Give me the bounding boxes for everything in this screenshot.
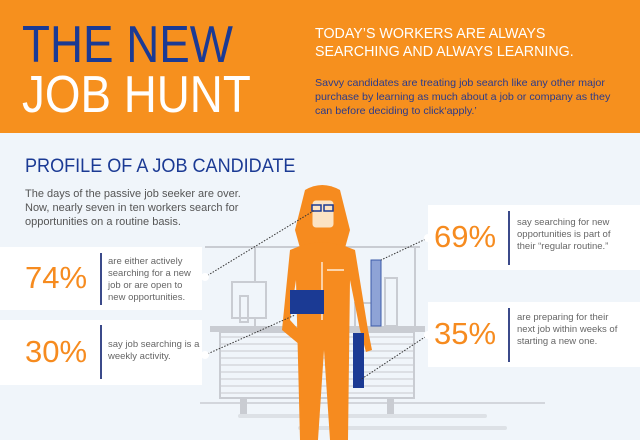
stat: 35% (428, 302, 640, 367)
title: THE NEW (22, 16, 233, 74)
subheading: TODAY’S WORKERS ARE ALWAYS (315, 25, 545, 42)
stat: 74% (0, 247, 202, 310)
intro text: purchase by learning as much about a job or company as they (315, 91, 610, 103)
intro text: can before deciding to click‘apply.’ (315, 105, 477, 117)
stat: 30%: say job searching is a (108, 339, 199, 350)
stat: 74%: searching for a new (108, 268, 191, 279)
subheading: SEARCHING AND ALWAYS LEARNING. (315, 43, 574, 60)
stat: 35%: are preparing for their (517, 312, 608, 323)
stat: 69%: their “regular routine.” (517, 241, 608, 252)
stat: 74%: new opportunities. (108, 292, 185, 303)
stat: 69% (428, 205, 640, 270)
stat: 69%: 69% (434, 219, 496, 254)
stat: 74%: 74% (25, 260, 87, 295)
section intro: The days of the passive job seeker are over. (25, 188, 241, 200)
section heading: PROFILE OF A JOB CANDIDATE (25, 156, 295, 177)
stat: 30% (0, 320, 202, 385)
intro text (315, 77, 610, 117)
stat: 35%: 35% (434, 316, 496, 351)
section intro: Now, nearly seven in ten workers search for (25, 202, 238, 214)
stat: 69%: opportunities is part of (517, 229, 610, 240)
subheading (315, 25, 574, 60)
header band (0, 0, 640, 133)
intro text: Savvy candidates are treating job search like any other major (315, 77, 605, 89)
stat: 35%: next job within weeks of (517, 324, 617, 335)
stat: 74%: are either actively (108, 256, 182, 267)
stat: 30%: 30% (25, 334, 87, 369)
stat: 74%: job or are open to (108, 280, 182, 291)
section intro: opportunities on a routine basis. (25, 216, 181, 228)
stat: 69%: say searching for new (517, 217, 609, 228)
section intro (25, 188, 241, 228)
stat: 35%: starting a new one. (517, 336, 597, 347)
figure (282, 185, 372, 440)
title (22, 16, 251, 124)
stat: 30%: weekly activity. (108, 351, 171, 362)
title: JOB HUNT (22, 66, 251, 124)
